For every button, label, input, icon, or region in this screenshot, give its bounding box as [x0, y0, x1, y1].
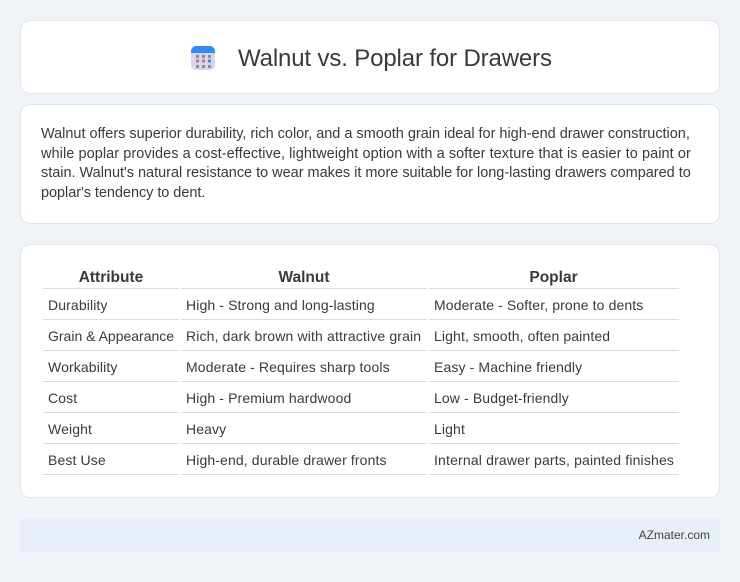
row: cost: Low - Budget-friendly [434, 390, 569, 406]
column headers: Poplar [529, 269, 578, 286]
row: weight: Heavy [186, 421, 226, 437]
row: grain and appearance: Light, smooth, often painted [434, 328, 610, 344]
comparison table [43, 269, 679, 475]
row: cost: Cost [48, 390, 77, 406]
row: best use [48, 452, 674, 468]
summary panel [20, 104, 720, 224]
row: grain and appearance: Rich, dark brown with attractive grain [186, 328, 421, 344]
row: best use: Best Use [48, 452, 106, 468]
column headers: Walnut [278, 269, 330, 286]
row: grain and appearance: Grain & Appearance [48, 328, 174, 344]
summary text: while poplar provides a cost-effective, lightweight option with a softer texture that is easier to paint or [41, 146, 691, 162]
footer bar [20, 518, 720, 552]
summary text [41, 126, 691, 201]
row: cost: High - Premium hardwood [186, 390, 351, 406]
row: durability [48, 297, 643, 313]
row: workability: Workability [48, 359, 118, 375]
column headers [79, 269, 578, 286]
footer credit: AZmater.com [639, 528, 710, 542]
summary text: stain. Walnut's natural resistance to wear makes it more suitable for long-lasting drawers compared to [41, 165, 691, 181]
row: best use: High-end, durable drawer fronts [186, 452, 387, 468]
row: workability: Moderate - Requires sharp tools [186, 359, 390, 375]
summary text: Walnut offers superior durability, rich color, and a smooth grain ideal for high-end drawer construction, [41, 126, 690, 142]
row: weight [48, 421, 465, 437]
summary text: poplar's tendency to dent. [41, 185, 205, 201]
row: durability: Moderate - Softer, prone to dents [434, 297, 643, 313]
header panel [20, 20, 720, 94]
row: best use: Internal drawer parts, painted finishes [434, 452, 674, 468]
row: workability: Easy - Machine friendly [434, 359, 582, 375]
icon: calendar [191, 46, 215, 70]
row: durability: Durability [48, 297, 108, 313]
table panel [20, 244, 720, 498]
row: weight: Weight [48, 421, 92, 437]
row: cost [48, 390, 569, 406]
column headers: Attribute [79, 269, 143, 286]
title: Walnut vs. Poplar for Drawers [238, 45, 552, 72]
row: workability [48, 359, 582, 375]
row: grain and appearance [48, 328, 610, 344]
row: weight: Light [434, 421, 465, 437]
row: durability: High - Strong and long-lasting [186, 297, 375, 313]
